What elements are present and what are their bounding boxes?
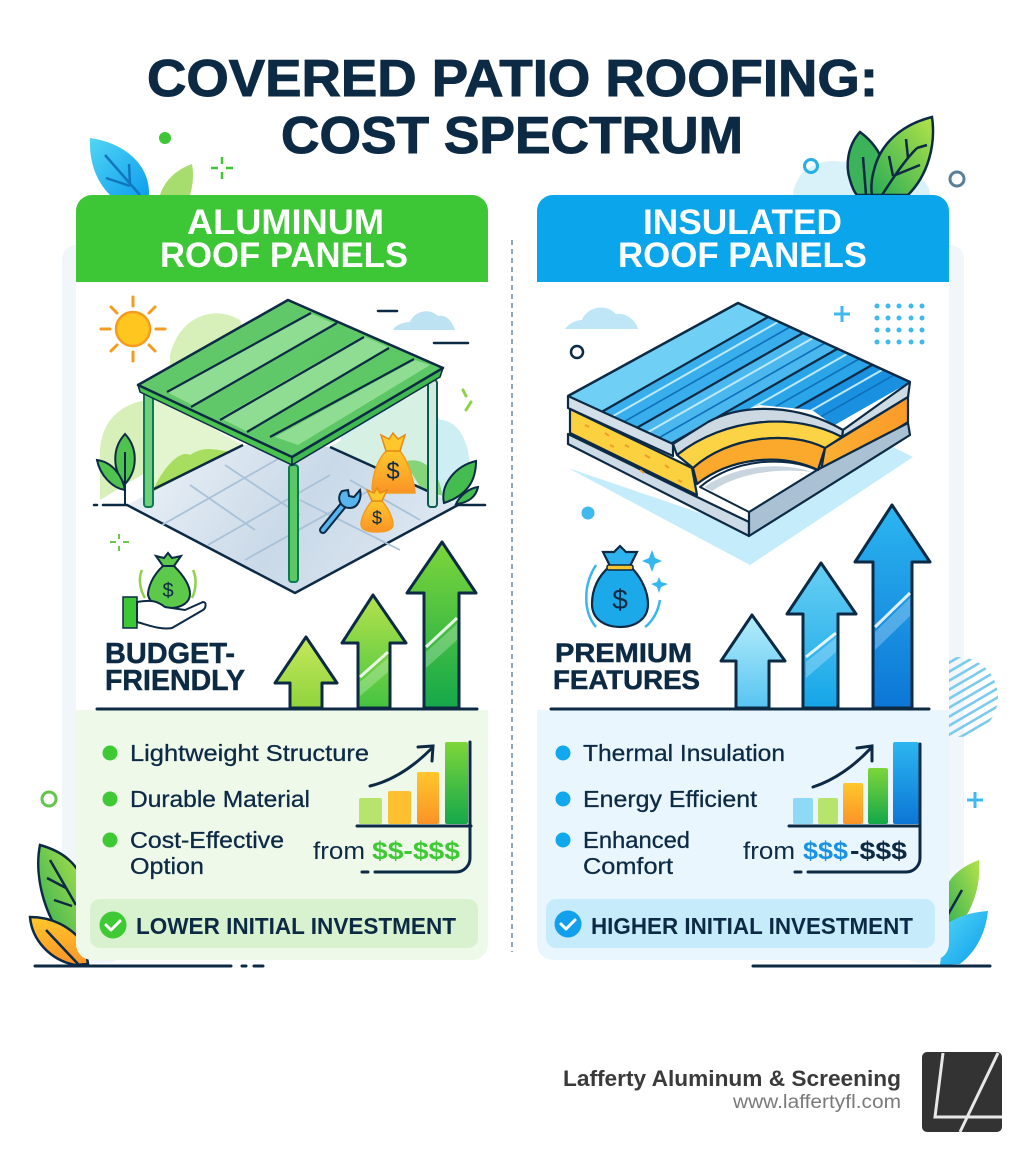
footer logo bbox=[922, 1052, 1002, 1132]
decoration: bottom-right leaves bbox=[940, 860, 988, 965]
footer brand text: www.laffertyfl.com bbox=[732, 1092, 901, 1113]
decoration: dots and marks bbox=[571, 304, 924, 520]
title bbox=[147, 50, 878, 165]
icon: hand with money bag: $ bbox=[162, 580, 174, 602]
panel shadow bbox=[568, 447, 913, 565]
panel: aluminum roof panels bbox=[76, 195, 488, 960]
chart: insulated cost bars: -$$$ bbox=[850, 837, 907, 865]
icon: money bag small: $ bbox=[372, 508, 382, 528]
divider bbox=[511, 240, 513, 952]
cutout inner shade bbox=[704, 466, 812, 491]
bullet list: insulated: Enhanced bbox=[583, 827, 690, 853]
chart: insulated cost bars: $$$ bbox=[803, 837, 848, 865]
icon: sun bbox=[101, 297, 165, 361]
label: premium features: FEATURES bbox=[553, 665, 700, 695]
panel lower area bbox=[537, 710, 949, 960]
bullet list: aluminum: Durable Material bbox=[130, 786, 310, 812]
icon: premium money bag bbox=[586, 546, 668, 627]
decoration: plus right bbox=[967, 792, 983, 808]
ground line left bbox=[35, 964, 263, 968]
panel top surface bbox=[570, 304, 908, 443]
cut layers arc bbox=[673, 409, 843, 484]
ground lines bbox=[94, 504, 485, 506]
back plate: right bbox=[904, 245, 964, 963]
back plate: left bbox=[62, 245, 122, 963]
bullet list: aluminum: Cost-Effective bbox=[130, 827, 284, 853]
footer brand text: Lafferty Aluminum & Screening bbox=[563, 1066, 901, 1091]
icon: money bag large: $ bbox=[386, 458, 400, 485]
sparkle bbox=[110, 534, 129, 551]
right edge layers bbox=[749, 382, 910, 536]
label: premium features bbox=[553, 638, 700, 695]
label: budget-friendly: BUDGET- bbox=[105, 638, 235, 670]
callout: lower initial investment bbox=[90, 899, 478, 948]
icon: premium money bag: $ bbox=[612, 584, 628, 615]
ground line right bbox=[753, 964, 990, 968]
icon: cloud bbox=[565, 307, 638, 329]
title: COVERED PATIO ROOFING: bbox=[147, 50, 878, 108]
decoration: top-right leaves bbox=[793, 117, 964, 195]
bullet list: aluminum bbox=[102, 740, 369, 879]
icon: hand with money bag bbox=[123, 553, 206, 628]
callout: higher initial investment bbox=[546, 899, 935, 948]
callout: higher initial investment: HIGHER INITIAL INVESTMENT bbox=[591, 913, 913, 939]
chart: rising blue arrows bbox=[551, 505, 930, 709]
bullet list: insulated bbox=[556, 740, 785, 879]
bullet list: aluminum: Option bbox=[130, 853, 204, 879]
icon: cloud bbox=[378, 311, 471, 410]
left foam speckles bbox=[585, 425, 682, 482]
bullet list: aluminum: Lightweight Structure bbox=[130, 740, 369, 766]
chart: rising green arrows bbox=[97, 542, 477, 709]
heading: insulated bbox=[537, 195, 949, 282]
bullet list: insulated: Thermal Insulation bbox=[583, 740, 785, 766]
label: budget-friendly: FRIENDLY bbox=[105, 665, 245, 697]
roof bbox=[138, 300, 443, 465]
chart: insulated cost bars: from bbox=[743, 838, 795, 865]
heading: insulated: INSULATED bbox=[643, 203, 842, 242]
icon: plant left bbox=[97, 434, 135, 504]
cutout opening bbox=[700, 462, 817, 512]
hatched circle decoration bbox=[949, 657, 998, 737]
decoration: bottom-left leaves bbox=[30, 792, 88, 965]
illustration: insulated panel cutaway bbox=[568, 303, 913, 565]
patio floor bbox=[127, 445, 458, 593]
icon: wrench bbox=[323, 490, 361, 530]
garden backdrop bbox=[100, 313, 470, 505]
decoration: top-left leaves bbox=[90, 132, 233, 195]
icon: money bag small bbox=[361, 488, 393, 532]
label: budget-friendly bbox=[105, 638, 245, 697]
title: COST SPECTRUM bbox=[281, 107, 743, 165]
heading: aluminum: ROOF PANELS bbox=[160, 236, 408, 275]
panel lower area bbox=[76, 710, 488, 960]
panel outer top edges bbox=[568, 303, 910, 396]
icon: plant right bbox=[443, 461, 478, 504]
chart: aluminum cost bars bbox=[313, 742, 471, 872]
heading: aluminum: ALUMINUM bbox=[187, 203, 384, 242]
heading: aluminum bbox=[76, 195, 488, 282]
bullet list: insulated: Energy Efficient bbox=[583, 786, 758, 812]
left edge layers bbox=[568, 396, 749, 536]
panel body bbox=[76, 260, 488, 712]
chart: aluminum cost bars: from bbox=[313, 838, 365, 865]
panel body bbox=[537, 260, 949, 712]
posts bbox=[144, 380, 437, 582]
chart: insulated cost bars bbox=[743, 742, 920, 872]
heading: insulated: ROOF PANELS bbox=[618, 236, 867, 275]
label: premium features: PREMIUM bbox=[555, 638, 692, 668]
footer brand text bbox=[563, 1066, 901, 1113]
panel: insulated roof panels bbox=[537, 195, 949, 960]
bullet list: insulated: Comfort bbox=[583, 853, 674, 879]
icon: money bag large bbox=[372, 433, 415, 493]
callout: lower initial investment: LOWER INITIAL INVESTMENT bbox=[136, 913, 456, 939]
chart: aluminum cost bars: $$-$$$ bbox=[372, 837, 460, 865]
